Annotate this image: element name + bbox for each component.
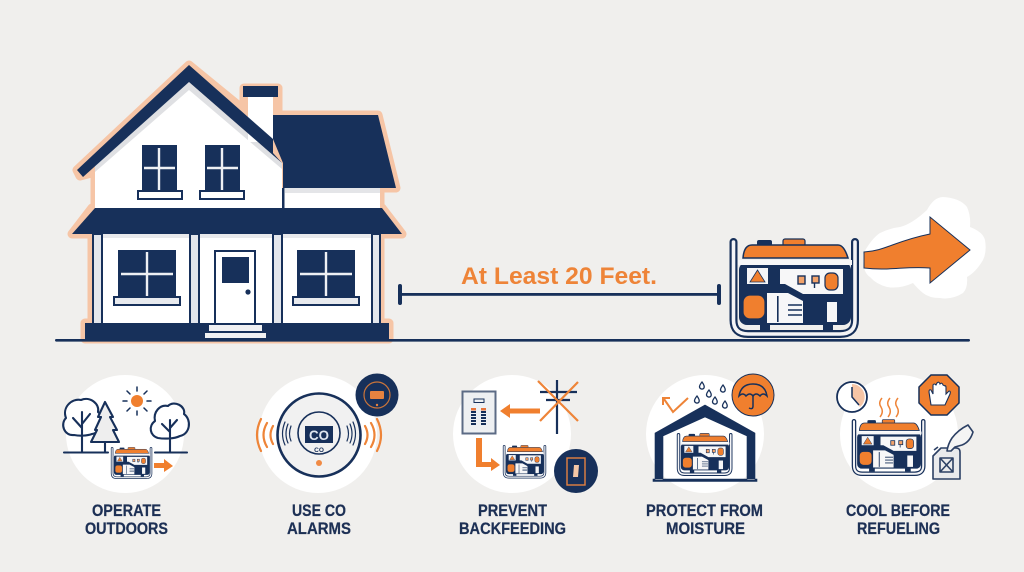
- umbrella badge: [732, 374, 774, 416]
- trees: [63, 399, 189, 452]
- panel: operate outdoors: [63, 375, 189, 493]
- label: use CO alarms: USE CO: [292, 501, 346, 520]
- label: cool before refueling: REFUELING: [857, 519, 940, 538]
- switch badge: [554, 449, 598, 493]
- small arrow: [154, 459, 173, 472]
- sun: [123, 387, 151, 415]
- alarm body: CO: [309, 427, 329, 443]
- door: [215, 251, 255, 324]
- clock: [837, 382, 867, 412]
- shelter: [653, 405, 757, 482]
- alarm body: CO: [314, 447, 324, 454]
- exhaust arrow: [864, 217, 970, 283]
- distance measure line: [398, 284, 721, 305]
- roof inner shadow: [95, 82, 282, 172]
- utility pole crossed out: [538, 380, 578, 434]
- lower wall: [92, 234, 380, 324]
- right roof: [273, 115, 396, 188]
- fuel can and hand: [933, 425, 973, 479]
- distance label: At Least 20 Feet.: [461, 263, 657, 290]
- stop sign with hand: [919, 375, 959, 415]
- right upper wall: [282, 188, 380, 208]
- small generator: [679, 433, 731, 474]
- icon circle: [646, 375, 764, 493]
- icon circle: [66, 375, 184, 493]
- panel: cool before refueling: [837, 375, 973, 493]
- icon circle: [259, 375, 377, 493]
- house illustration: [72, 65, 402, 339]
- arrow to panel: [500, 404, 540, 418]
- rain drops: [694, 382, 727, 408]
- sound waves: [257, 419, 381, 451]
- upper windows: [138, 145, 244, 199]
- lower windows: [114, 250, 359, 305]
- main generator: [734, 239, 855, 334]
- porch roof: [72, 208, 402, 234]
- panel: protect from moisture: [646, 374, 774, 493]
- generator: [854, 420, 923, 474]
- alarm body: [278, 394, 360, 476]
- house peach outline: [72, 65, 402, 339]
- alarm badge: [356, 374, 398, 416]
- small generator: [112, 447, 151, 478]
- label: prevent backfeeding: PREVENT: [478, 501, 548, 520]
- upper wall: [95, 82, 282, 208]
- panel: use CO alarms: [257, 374, 398, 493]
- label: operate outdoors: OPERATE: [92, 501, 161, 520]
- gable roof: [77, 65, 282, 177]
- label: prevent backfeeding: BACKFEEDING: [459, 519, 566, 538]
- heat waves: [880, 398, 898, 417]
- label: cool before refueling: COOL BEFORE: [846, 501, 950, 520]
- label: protect from moisture: PROTECT FROM: [646, 501, 763, 520]
- arrow to generator: [476, 438, 500, 471]
- small generator: [504, 445, 545, 477]
- chimney: [243, 86, 278, 142]
- breaker panel: [462, 392, 496, 434]
- ground line: [55, 339, 970, 342]
- icon circle: [840, 375, 958, 493]
- label: use CO alarms: ALARMS: [287, 519, 351, 538]
- exhaust cloud: [863, 197, 986, 298]
- deflect arrow: [663, 398, 688, 412]
- label: operate outdoors: OUTDOORS: [85, 519, 168, 538]
- panel: prevent backfeeding: [453, 375, 598, 493]
- porch columns: [93, 234, 380, 324]
- foundation and steps: [85, 323, 389, 339]
- icon circle: [453, 375, 571, 493]
- label: protect from moisture: MOISTURE: [666, 519, 745, 538]
